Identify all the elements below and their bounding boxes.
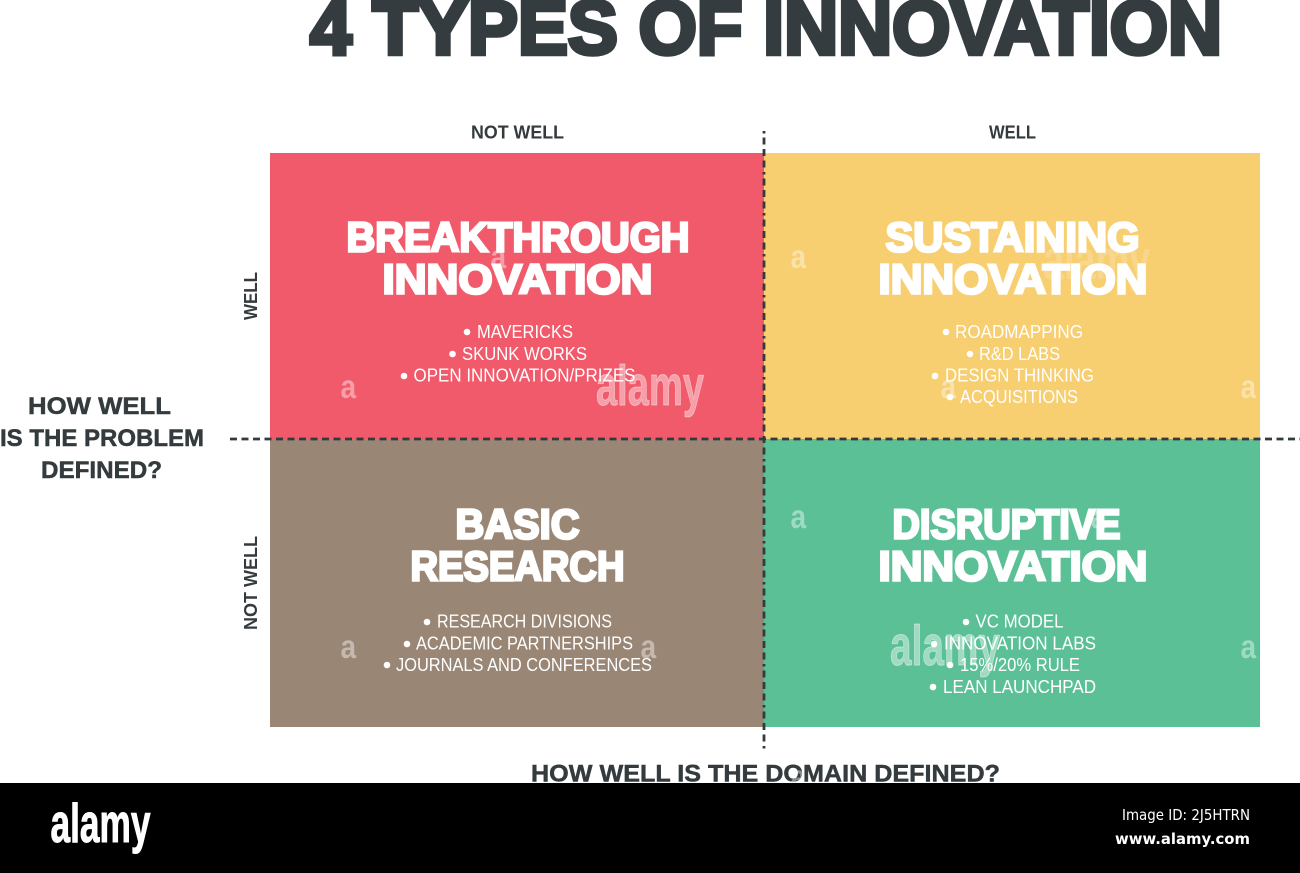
watermark: alamy marks: alamy <box>890 614 1000 678</box>
panel: sustaining innovation <box>764 153 1260 439</box>
list: breakthrough methods <box>401 321 636 386</box>
website url: www.alamy.com <box>1115 830 1250 848</box>
list: basic research methods: RESEARCH DIVISIONS <box>437 610 612 632</box>
watermark: alamy marks: a <box>490 239 507 276</box>
list: basic research methods: JOURNALS AND CONFERENCES <box>396 654 652 675</box>
watermark: alamy marks: a <box>1090 499 1107 536</box>
panel: breakthrough innovation <box>270 153 764 439</box>
list: sustaining methods: DESIGN THINKING <box>945 364 1094 386</box>
watermark: alamy marks: a <box>640 629 657 666</box>
list: basic research methods: ACADEMIC PARTNERSHIPS <box>416 632 633 654</box>
image id: Image ID: 2J5HTRN <box>1122 806 1250 824</box>
heading: basic research: RESEARCH <box>410 542 624 590</box>
watermark: alamy marks: a <box>340 629 357 666</box>
watermark: alamy marks: alamy <box>596 354 704 418</box>
watermark: alamy marks: a <box>790 759 807 796</box>
list: sustaining methods: ACQUISITIONS <box>960 386 1078 407</box>
row label: not well: NOT WELL <box>241 536 261 630</box>
heading: sustaining innovation: SUSTAINING <box>886 214 1140 260</box>
watermark: alamy marks: a <box>1240 629 1257 666</box>
horizontal axis title: HOW WELL IS THE DOMAIN DEFINED? <box>531 760 1000 788</box>
vertical axis title: IS THE PROBLEM <box>0 425 204 452</box>
vertical axis title <box>0 393 204 484</box>
column label: well: WELL <box>989 122 1036 142</box>
footer bar <box>0 783 1300 873</box>
panel: basic research <box>270 439 764 727</box>
heading: breakthrough innovation: INNOVATION <box>382 256 652 302</box>
vertical axis title: HOW WELL <box>28 393 171 420</box>
panel: disruptive innovation <box>764 439 1260 727</box>
list: disruptive methods: INNOVATION LABS <box>944 632 1096 654</box>
watermark: alamy marks <box>340 228 1257 796</box>
watermark: alamy marks: a <box>940 369 957 406</box>
column label: not well: NOT WELL <box>471 122 564 142</box>
list: basic research methods <box>384 610 652 675</box>
heading: breakthrough innovation: BREAKTHROUGH <box>346 214 690 260</box>
list: breakthrough methods: MAVERICKS <box>477 321 573 342</box>
list: breakthrough methods: SKUNK WORKS <box>462 343 587 364</box>
list: disruptive methods: LEAN LAUNCHPAD <box>943 676 1096 697</box>
list: sustaining methods: ROADMAPPING <box>955 321 1083 342</box>
list: disruptive methods <box>930 610 1096 697</box>
list: disruptive methods: 15%/20% RULE <box>960 654 1080 675</box>
heading: basic research <box>410 500 624 590</box>
list: sustaining methods <box>932 321 1094 407</box>
heading: breakthrough innovation <box>346 214 690 302</box>
footer logo: alamy: alamy <box>50 792 151 854</box>
heading: basic research: BASIC <box>456 500 580 548</box>
heading: disruptive innovation: DISRUPTIVE <box>892 500 1120 548</box>
watermark: alamy marks: a <box>340 369 357 406</box>
list: disruptive methods: VC MODEL <box>976 610 1064 632</box>
list: breakthrough methods: OPEN INNOVATION/PRIZES <box>414 364 636 386</box>
watermark: alamy marks: alamy <box>1043 228 1150 292</box>
heading: disruptive innovation: INNOVATION <box>878 542 1148 590</box>
watermark: alamy marks: a <box>790 499 807 536</box>
heading: disruptive innovation <box>878 500 1148 590</box>
watermark: alamy marks: a <box>1240 369 1257 406</box>
watermark: alamy marks: a <box>790 239 807 276</box>
list: sustaining methods: R&D LABS <box>979 343 1060 364</box>
vertical axis title: DEFINED? <box>41 457 162 484</box>
heading: sustaining innovation <box>878 214 1148 302</box>
row label: well: WELL <box>241 272 261 320</box>
heading: sustaining innovation: INNOVATION <box>878 256 1148 302</box>
